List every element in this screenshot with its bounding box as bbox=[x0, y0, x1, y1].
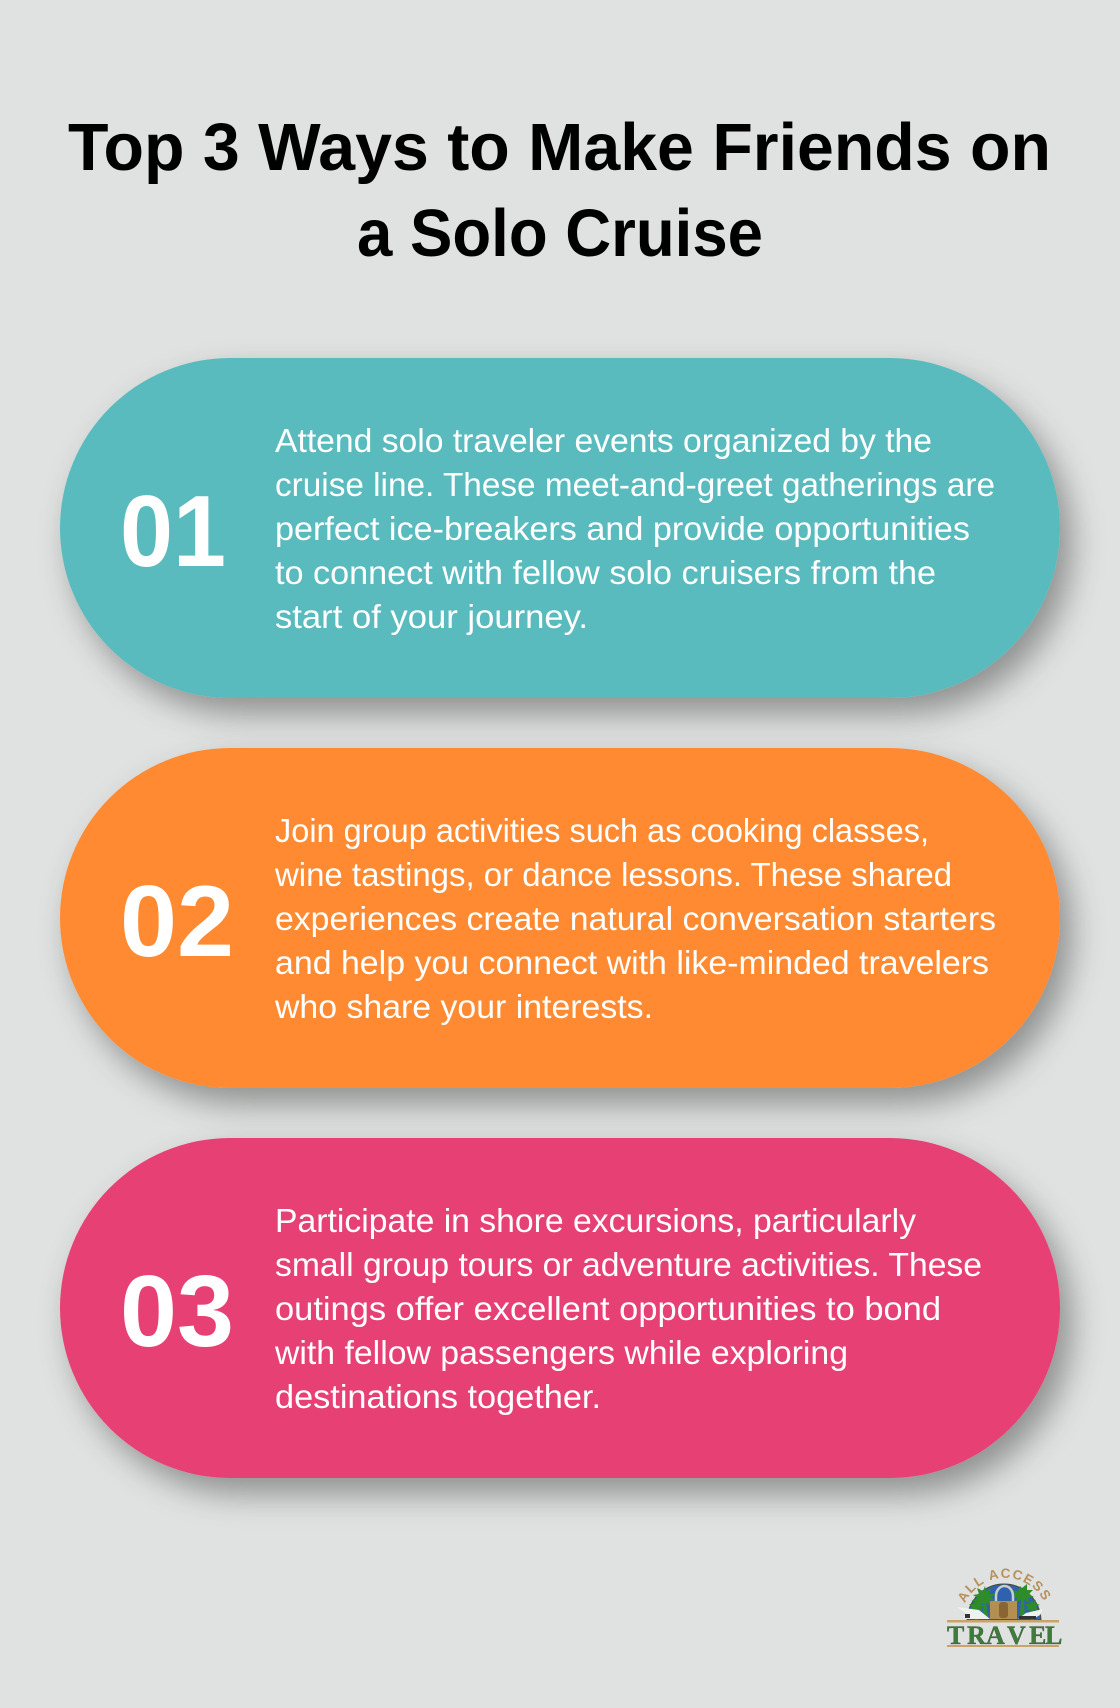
number 02: 02 bbox=[120, 866, 234, 978]
text block: step 03: Participate in shore excursions, particularly bbox=[275, 1202, 917, 1239]
text block: step 03: outings offer excellent opportunities to bond bbox=[275, 1290, 941, 1327]
text block: step 02: who share your interests. bbox=[274, 988, 653, 1025]
text block: step 01: perfect ice-breakers and provide opportunities bbox=[275, 510, 970, 547]
text block: step 01: start of your journey. bbox=[275, 598, 588, 635]
pill: orange bbox=[60, 748, 1060, 1088]
panel: step 01 bbox=[60, 358, 1060, 698]
logo boats bbox=[957, 1607, 1043, 1619]
logo palms bbox=[969, 1584, 1040, 1620]
pill: pink bbox=[60, 1138, 1060, 1478]
text block: step 02: and help you connect with like-minded travelers bbox=[275, 944, 989, 981]
logo padlock bbox=[990, 1586, 1017, 1619]
title: Top 3 Ways to Make Friends on bbox=[68, 110, 1051, 185]
text block: step 03 bbox=[274, 1202, 982, 1415]
logo word: TRAVEL bbox=[947, 1621, 1062, 1650]
text block: step 02: wine tastings, or dance lessons. These shared bbox=[274, 856, 952, 893]
number 03: 03 bbox=[120, 1256, 234, 1368]
panel: step 02 bbox=[60, 748, 1060, 1088]
text block: step 02: experiences create natural conversation starters bbox=[275, 900, 996, 937]
logo: All Access Travel bbox=[947, 1568, 1062, 1650]
text block: step 03: small group tours or adventure activities. These bbox=[275, 1246, 982, 1283]
text block: step 02 bbox=[274, 812, 996, 1025]
panel: step 03 bbox=[60, 1138, 1060, 1478]
logo dome bbox=[967, 1584, 1041, 1620]
text block: step 01: cruise line. These meet-and-greet gatherings are bbox=[275, 466, 995, 503]
text block: step 01: to connect with fellow solo cruisers from the bbox=[275, 554, 936, 591]
text block: step 02: Join group activities such as cooking classes, bbox=[275, 812, 929, 849]
text block: step 03: with fellow passengers while exploring bbox=[274, 1334, 848, 1371]
title: a Solo Cruise bbox=[357, 196, 763, 271]
text block: step 03: destinations together. bbox=[275, 1378, 601, 1415]
title bbox=[68, 110, 1051, 271]
logo arc text: ALL ACCESS bbox=[958, 1568, 1050, 1603]
pill: teal bbox=[60, 358, 1060, 698]
logo gold rules bbox=[947, 1620, 1059, 1622]
text block: step 01: Attend solo traveler events organized by the bbox=[275, 422, 932, 459]
number 01: 01 bbox=[120, 476, 226, 588]
text block: step 01 bbox=[275, 422, 995, 635]
